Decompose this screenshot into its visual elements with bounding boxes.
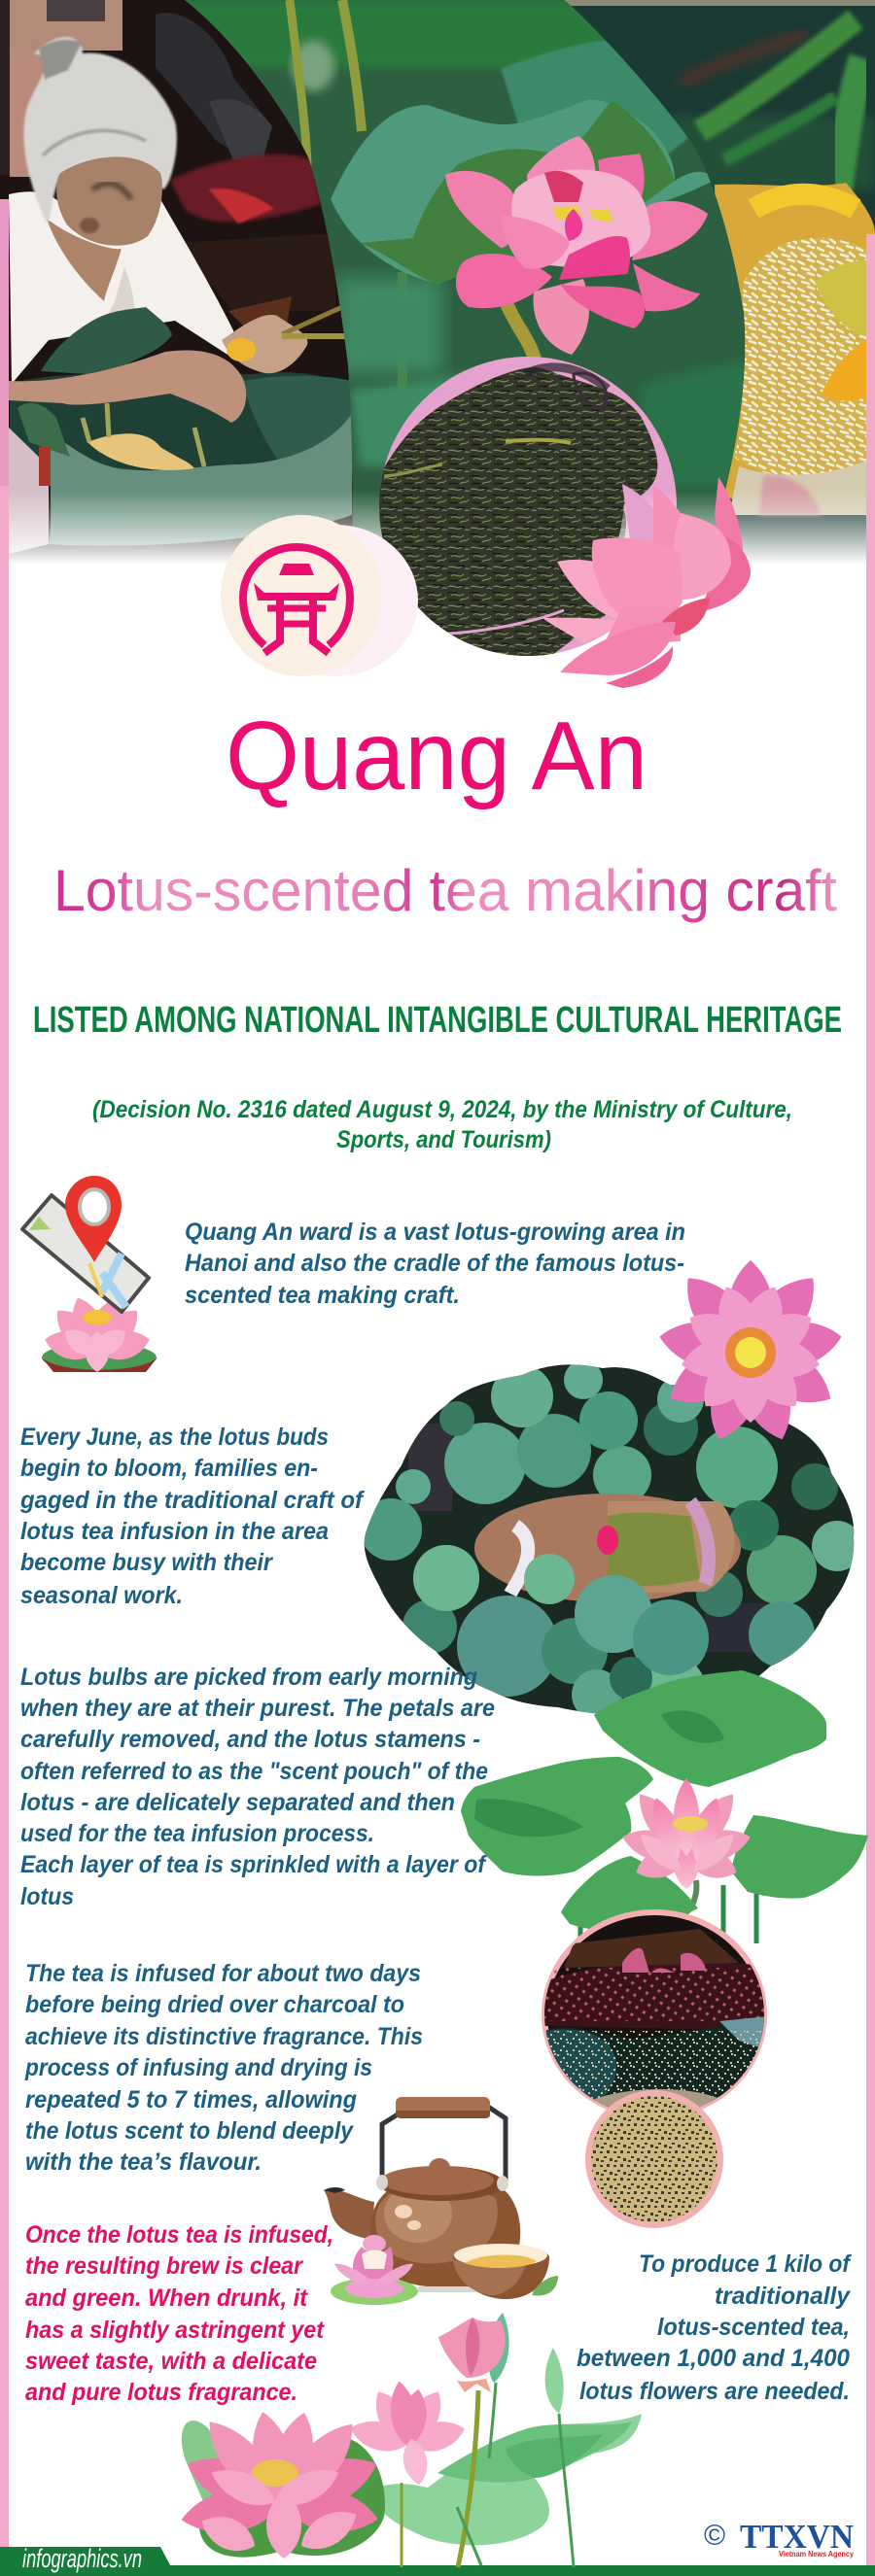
text: taste (pink): the resulting brew is clear xyxy=(25,2252,303,2280)
text: infusion process: with the tea’s flavour. xyxy=(25,2148,262,2176)
hair xyxy=(23,37,177,223)
stalks xyxy=(290,0,307,165)
title: Quang An xyxy=(226,702,648,810)
TTXVN logo: TTXVN xyxy=(740,2518,854,2556)
face xyxy=(56,156,162,246)
badge disc xyxy=(221,515,382,676)
text: production quantity: traditionally xyxy=(715,2283,851,2310)
bottom bar xyxy=(0,2565,875,2576)
lid xyxy=(379,2166,504,2201)
Hanoi emblem xyxy=(243,547,350,653)
phone xyxy=(22,1195,149,1312)
photo: tea scattered on net xyxy=(544,1912,768,2128)
bud lotus xyxy=(438,2318,506,2392)
text: infusion process: process of infusing and drying is xyxy=(24,2054,372,2081)
white area below the photos xyxy=(0,564,875,593)
neck xyxy=(47,219,122,301)
tall leaf xyxy=(545,2348,564,2414)
text: Every June: gaged in the traditional craft of xyxy=(19,1487,366,1514)
text: Every June: become busy with their xyxy=(20,1549,273,1576)
tea oval re-drawn portion below the fade xyxy=(379,484,653,656)
decision note: Sports, and Tourism) xyxy=(336,1126,551,1153)
pink petals xyxy=(622,1948,706,1973)
logo badge xyxy=(221,515,418,676)
main leaf xyxy=(331,100,715,284)
rice heap xyxy=(593,2089,718,2107)
text: infusion process: The tea is infused for about two days xyxy=(25,1960,421,1987)
text: Quang An ward: scented tea making craft. xyxy=(185,1282,460,1309)
spout xyxy=(324,2189,374,2240)
text: Every June: begin to bloom, families en- xyxy=(20,1455,318,1482)
front leaf xyxy=(49,414,352,546)
right hand xyxy=(222,315,308,373)
photo: dried green tea leaves on pink bowl xyxy=(374,350,685,661)
photo: lily pads with basket of lotus xyxy=(360,1360,862,1720)
text: Lotus bulbs: when they are at their purest. The petals are xyxy=(20,1695,495,1722)
leaves over basket xyxy=(413,1545,479,1611)
TTXVN logo: Vietnam News Agency xyxy=(779,2549,854,2559)
text: production quantity: between 1,000 and 1,400 xyxy=(577,2345,850,2372)
blouse xyxy=(9,191,238,384)
TTXVN logo xyxy=(704,2518,854,2559)
source tab: infographics.vn xyxy=(22,2544,142,2573)
text: taste (pink): and green. When drunk, it xyxy=(25,2284,309,2312)
text: infusion process: before being dried over charcoal to xyxy=(25,1991,404,2018)
subtitle: Lotus-scented tea making craft xyxy=(53,858,837,923)
text: Lotus bulbs: Each layer of tea is sprinkled with a layer of xyxy=(20,1851,487,1878)
text: Every June: lotus tea infusion in the area xyxy=(20,1518,329,1545)
text: Quang An ward xyxy=(185,1219,685,1309)
pot body xyxy=(370,2180,520,2287)
basket xyxy=(474,1494,741,1602)
flower bud in hand xyxy=(227,338,256,361)
text: taste (pink): has a slightly astringent yet xyxy=(25,2317,326,2344)
stems xyxy=(282,307,342,334)
arm and hand xyxy=(9,350,246,423)
text: Every June: seasonal work. xyxy=(20,1582,183,1609)
basket inner xyxy=(10,372,351,470)
badge shadow xyxy=(253,525,418,676)
small lotus xyxy=(331,2235,418,2305)
map pin xyxy=(65,1176,122,1262)
photo: woman preparing lotus flowers xyxy=(0,0,360,573)
text: Lotus bulbs: often referred to as the "scent pouch" of the xyxy=(20,1758,488,1785)
photo: yellow lotus stamens on dark green xyxy=(544,0,875,573)
shadow xyxy=(418,2286,544,2292)
leaf right xyxy=(731,1815,868,1899)
text: infusion process: the lotus scent to blend deeply xyxy=(25,2117,354,2145)
lotus flower xyxy=(445,136,708,355)
text: taste (pink): Once the lotus tea is infused, xyxy=(25,2221,333,2249)
middle lotus xyxy=(346,2380,469,2487)
text: Lotus bulbs: Lotus bulbs are picked from early morning xyxy=(20,1664,477,1691)
pink lotus xyxy=(618,1778,754,1889)
text: production quantity: lotus flowers are needed. xyxy=(579,2378,850,2405)
text: Lotus bulbs: used for the tea infusion process. xyxy=(20,1820,374,1847)
right border xyxy=(866,234,875,2576)
leaf lower xyxy=(561,1856,698,1933)
bottom lotus leaves and stems xyxy=(371,2313,642,2567)
text: Every June: Every June, as the lotus buds xyxy=(20,1424,329,1451)
photo: tea grains close-up xyxy=(588,2093,720,2225)
lotus leaves with pink flower xyxy=(461,1670,868,1943)
flower: magenta lotus xyxy=(655,1260,846,1447)
cup xyxy=(453,2247,549,2299)
back leaf xyxy=(500,39,688,155)
text: Lotus bulbs xyxy=(20,1664,495,1910)
text: Every June xyxy=(19,1424,366,1609)
white fade over photos xyxy=(0,491,875,565)
small leaf xyxy=(532,2276,558,2296)
big lotus with leaf xyxy=(178,2408,385,2559)
text: Quang An ward: Quang An ward is a vast lotus-growing area in xyxy=(185,1219,685,1246)
icon: teapot and cup xyxy=(324,2097,558,2305)
pink lotus over tea xyxy=(542,477,751,688)
text: Lotus bulbs: lotus - are delicately separated and then xyxy=(20,1789,455,1816)
lower left skirt xyxy=(9,428,49,554)
text: Quang An ward: Hanoi and also the cradle of the famous lotus- xyxy=(185,1250,684,1277)
text: infusion process xyxy=(24,1960,423,2176)
leaf top xyxy=(594,1670,826,1787)
decision note xyxy=(92,1096,792,1153)
text: infusion process: achieve its distinctive fragrance. This xyxy=(25,2023,423,2050)
photo: pink lotus and green leaves xyxy=(185,0,758,573)
text: taste (pink) xyxy=(25,2221,333,2406)
text: Lotus bulbs: lotus xyxy=(20,1883,74,1910)
left pink strip xyxy=(0,199,9,491)
text: Lotus bulbs: carefully removed, and the lotus stamens - xyxy=(20,1726,480,1753)
text: infusion process: repeated 5 to 7 times, allowing xyxy=(25,2086,357,2113)
dark leaf xyxy=(41,307,172,374)
leaf left xyxy=(461,1757,653,1875)
teal cloth xyxy=(544,2016,768,2109)
text: production quantity: To produce 1 kilo of xyxy=(639,2250,852,2278)
stems xyxy=(559,2414,574,2567)
handle xyxy=(382,2107,506,2184)
TTXVN logo: © xyxy=(704,2520,725,2552)
text: taste (pink): sweet taste, with a delicate xyxy=(25,2348,317,2375)
icon: phone with map pin on lotus xyxy=(22,1176,158,1372)
text: production quantity xyxy=(577,2250,852,2405)
left border xyxy=(0,486,9,2576)
text: production quantity: lotus-scented tea, xyxy=(657,2314,850,2341)
decision note: (Decision No. 2316 dated August 9, 2024, by the Ministry of Culture, xyxy=(92,1096,792,1123)
big pale leaf xyxy=(371,2414,642,2545)
handle clips xyxy=(376,2175,388,2190)
flowers in basket xyxy=(88,433,194,470)
text: taste (pink): and pure lotus fragrance. xyxy=(25,2379,298,2406)
